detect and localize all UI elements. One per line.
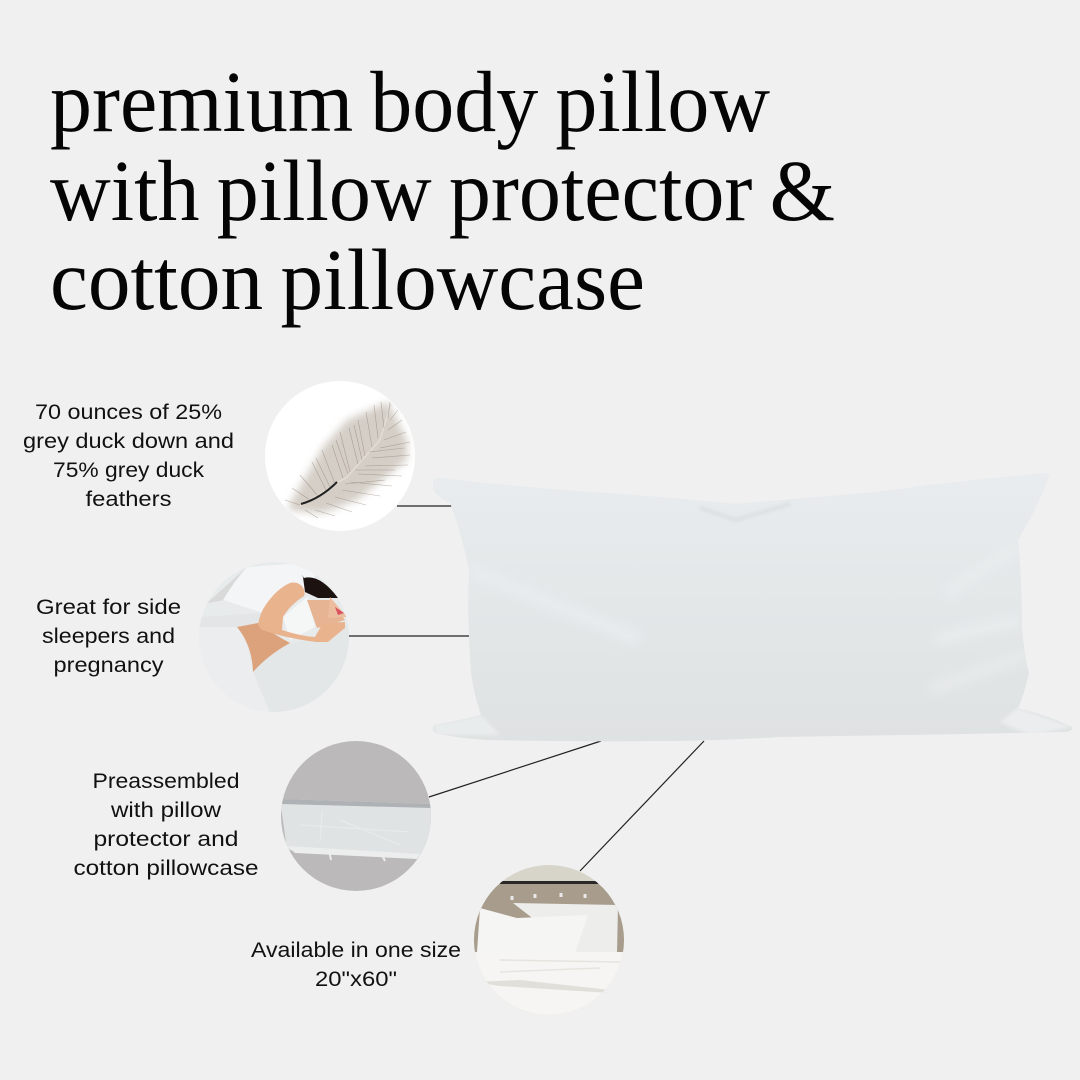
- photo: bed: [474, 865, 624, 1015]
- text: down and feathers: 75% grey duck: [53, 458, 204, 482]
- text: preassembled: cotton pillowcase: [74, 856, 258, 880]
- text: down and feathers: feathers: [86, 487, 172, 511]
- title: cotton pillowcase: [50, 231, 645, 328]
- text: preassembled: protector and: [94, 827, 238, 851]
- text: side sleepers: pregnancy: [54, 653, 164, 677]
- connector lines: [349, 506, 704, 871]
- text: preassembled: [74, 769, 258, 880]
- text: size: Available in one size: [251, 938, 461, 962]
- text: size: 20"x60": [315, 967, 397, 991]
- title: with pillow protector &: [50, 142, 835, 239]
- photo: pillow protector: [280, 741, 431, 891]
- text: side sleepers: sleepers and: [42, 624, 175, 648]
- pillow image: [433, 473, 1072, 741]
- text: down and feathers: [23, 400, 234, 511]
- photo: feather: [265, 381, 415, 531]
- text: down and feathers: 70 ounces of 25%: [35, 400, 222, 424]
- text: down and feathers: grey duck down and: [23, 429, 234, 453]
- title: [50, 53, 835, 328]
- title: premium body pillow: [50, 53, 770, 150]
- text: preassembled: with pillow: [110, 798, 222, 822]
- photo: side sleeper: [198, 562, 350, 713]
- feather strands: [285, 402, 410, 518]
- text: preassembled: Preassembled: [92, 769, 240, 793]
- text: side sleepers: [36, 595, 181, 677]
- text: side sleepers: Great for side: [36, 595, 181, 619]
- text: size: [251, 938, 461, 991]
